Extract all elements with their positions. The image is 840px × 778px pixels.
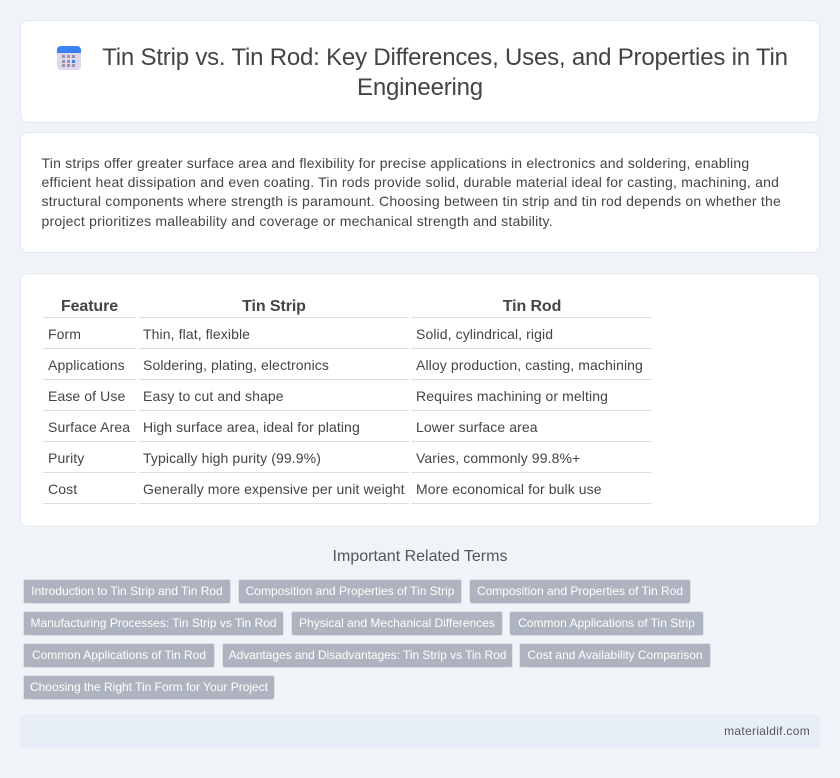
tag [23,675,275,700]
row: surface area: Surface Area [48,419,130,435]
panel: comparison table: Soldering, plating, electronics [143,357,329,373]
panel: comparison table: Requires machining or melting [416,388,608,404]
tag: Introduction to Tin Strip and Tin Rod [31,584,223,598]
tag [509,611,704,636]
panel: comparison table: High surface area, ideal for plating [143,419,360,435]
panel: comparison table: Alloy production, casting, machining [416,357,643,373]
tag [519,643,711,668]
panel: comparison table: Tin Strip [242,298,306,315]
panel: comparison table: More economical for bulk use [416,481,602,497]
tag: Composition and Properties of Tin Strip [246,584,454,598]
tag: Choosing the Right Tin Form for Your Project [30,680,268,694]
tag [238,579,462,604]
tag: Common Applications of Tin Strip [518,616,695,630]
tag: Advantages and Disadvantages: Tin Strip vs Tin Rod [229,648,506,662]
header panel [20,20,820,123]
summary text: structural components where strength is paramount. Choosing between tin strip and tin rod depends on whether the [42,193,781,209]
summary text: efficient heat dissipation and even coating. Tin rods provide solid, durable material ideal for casting, machining, and [42,174,779,190]
tag [222,643,513,668]
footer bar [20,714,820,748]
panel: summary [20,132,820,253]
summary text: Tin strips offer greater surface area and flexibility for precise applications in electronics and soldering, enabling [42,155,749,171]
title [102,44,788,101]
row: ease of use: Ease of Use [48,388,125,404]
icon: calendar [57,46,81,70]
tag [23,611,284,636]
panel: comparison table: Generally more expensive per unit weight [143,481,405,497]
row: applications: Applications [48,357,125,373]
tag [23,643,215,668]
panel: comparison table [20,273,820,527]
tag: Cost and Availability Comparison [527,648,703,662]
tag: Physical and Mechanical Differences [299,616,495,630]
panel: comparison table: Lower surface area [416,419,538,435]
panel: comparison table: Typically high purity (99.9%) [143,450,321,466]
table header: Feature [61,298,118,315]
panel: comparison table: Varies, commonly 99.8%+ [416,450,580,466]
related terms tags [23,579,711,700]
related terms heading: Important Related Terms [333,548,507,565]
tag [469,579,691,604]
summary text: project prioritizes malleability and coverage or mechanical strength and stability. [42,213,553,229]
row: purity: Purity [48,450,84,466]
panel: comparison table: Thin, flat, flexible [143,326,250,342]
title: Tin Strip vs. Tin Rod: Key Differences, Uses, and Properties in Tin [102,44,788,71]
tag: Manufacturing Processes: Tin Strip vs Tin Rod [30,616,277,630]
panel: comparison table: Easy to cut and shape [143,388,284,404]
panel: comparison table: Tin Rod [503,298,561,315]
title: Engineering [357,74,483,101]
panel: comparison table: Solid, cylindrical, rigid [416,326,553,342]
row: cost: Cost [48,481,77,497]
footer source: materialdif.com [724,724,810,738]
tag: Common Applications of Tin Rod [32,648,206,662]
summary text [42,155,781,229]
tag: Composition and Properties of Tin Rod [477,584,683,598]
row: form: Form [48,326,81,342]
tag [23,579,231,604]
tag [291,611,503,636]
